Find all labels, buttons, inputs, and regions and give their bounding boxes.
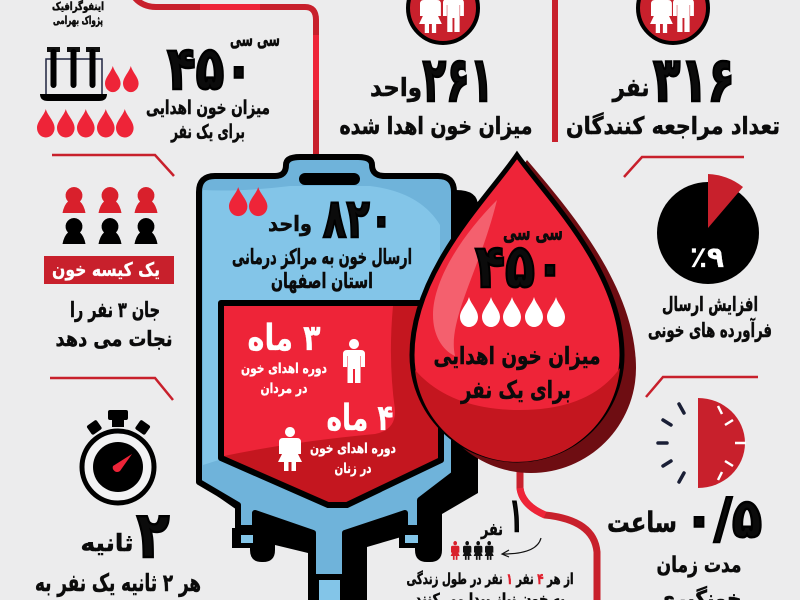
connector pipe: top: [135, 0, 316, 156]
bag shadow: [217, 190, 478, 600]
panel: 450 cc per person, top left: [37, 27, 280, 143]
text: 4 months women: در زنان: [334, 461, 372, 477]
text: 2 seconds: [35, 499, 201, 597]
text: 450 cc: برای یک نفر: [170, 121, 245, 143]
panel: one in four people: [406, 488, 574, 600]
text: 3 months men: ۳ ماه: [248, 318, 321, 359]
text: 9 percent: ٪۹: [690, 240, 724, 274]
icon: test tubes: [40, 47, 107, 101]
panel: number of visitors: [566, 0, 780, 140]
text: saves three people: نجات می دهد: [56, 327, 172, 351]
text: 261 units: واحد: [370, 73, 422, 103]
divider line: top right: [552, 0, 558, 142]
icon: two drops: [229, 187, 267, 216]
text: 450 cc: میزان خون اهدایی: [434, 342, 600, 370]
text: 820 units: [232, 187, 412, 293]
icon: couple badge: [408, 0, 478, 43]
text: 4 months women: دوره اهدای خون: [310, 441, 396, 457]
label: one blood bag: [44, 256, 174, 284]
text: 0.5 hours: [607, 487, 762, 600]
text: 3 months men: دوره اهدای خون: [241, 361, 327, 377]
label: one blood bag: یک کیسه خون: [52, 259, 160, 281]
bag handle slot: [299, 173, 360, 185]
text: 3 months men: [241, 318, 327, 397]
text: 450 cc: ۴۵۰: [167, 34, 253, 104]
connector line: lower right: [646, 377, 758, 397]
large blood drop: [412, 155, 636, 473]
text: 3 months men: در مردان: [260, 381, 308, 397]
panel: 9 percent increase: [648, 174, 772, 342]
connector line: lower left: [50, 378, 173, 400]
text: 261 units: ۲۶۱: [422, 43, 494, 116]
text: 261 units: [340, 43, 532, 140]
text: 450 cc: برای یک نفر: [460, 376, 571, 404]
panel: one in four people: ۱: [510, 488, 522, 542]
drop body: [412, 155, 622, 460]
blood panel: [221, 303, 441, 505]
panel: stopwatch, every 2 seconds: [35, 410, 201, 597]
text: 450 cc: میزان خون اهدایی: [146, 97, 270, 119]
text: 4 months women: [310, 398, 396, 477]
credit text: [52, 0, 104, 27]
pie chart: [657, 174, 759, 284]
text: 820 units: استان اصفهان: [271, 269, 373, 293]
text: 820 units: ارسال خون به مراکز درمانی: [232, 245, 412, 269]
bag highlight: [203, 186, 440, 465]
text: 820 units: ۸۲۰: [323, 187, 393, 250]
text: 316 people: ۳۱۶: [653, 43, 735, 116]
icon: six people: [62, 187, 158, 244]
panel: half hour duration: [607, 398, 762, 600]
text: 2 seconds: هر ۲ ثانیه یک نفر به: [35, 569, 201, 597]
text: 0.5 hours: ساعت: [607, 506, 677, 539]
connector pipe: bottom: [520, 470, 597, 600]
text: 2 seconds: ۲: [136, 499, 170, 573]
connector line: upper left: [52, 155, 174, 176]
text: 820 units: واحد: [268, 212, 312, 236]
icon: four people: [451, 541, 494, 560]
text: 450 cc: سی سی: [230, 27, 280, 51]
text: 1 person: [480, 488, 522, 542]
blood bag: [199, 157, 478, 600]
credit text: اینفوگرافیک: [52, 0, 104, 13]
text: 450 cc: [146, 27, 280, 143]
text: 1 person: نفر: [480, 520, 503, 540]
credit text: پژواک بهرامی: [53, 14, 103, 27]
bag body: [199, 157, 454, 577]
panel: donated units: [340, 0, 532, 140]
text: one in four needs blood: از هر ۴ نفر ۱ نفر در طول زندگی: [406, 570, 574, 588]
icon: half clock: [658, 398, 746, 488]
icon: couple badge: [638, 0, 708, 43]
text: one in four needs blood: [406, 570, 574, 600]
panel: one blood bag saves three lives: [44, 187, 174, 351]
text: 2 seconds: ثانیه: [80, 529, 134, 557]
text: 261 units: میزان خون اهدا شده: [340, 112, 532, 140]
text: 0.5 hours: ۰/۵: [684, 487, 762, 550]
drop shadow: [426, 160, 636, 473]
connector line: upper right: [624, 157, 744, 177]
text: 450 cc: ۴۵۰: [475, 232, 565, 302]
text: 4 months women: ۴ ماه: [326, 398, 394, 439]
text: 316 people: [566, 43, 780, 140]
arrow: [502, 538, 541, 557]
icon: stopwatch: [82, 410, 154, 503]
port caps: [232, 528, 427, 600]
text: saves three people: [56, 298, 172, 351]
icon: red drops: [37, 66, 139, 138]
drop highlight: [433, 200, 497, 356]
icon: five white drops: [460, 297, 565, 327]
drop lower shade: [415, 368, 620, 462]
text: 316 people: نفر: [611, 73, 650, 103]
icon: man: [343, 339, 365, 383]
text: saves three people: جان ۳ نفر را: [70, 298, 160, 322]
text: caption: [648, 292, 772, 342]
icon: woman: [278, 427, 302, 471]
text: 450 cc: سی سی: [503, 220, 563, 246]
text: 450 cc: [434, 220, 600, 404]
text: 0.5 hours: مدت زمان: [656, 553, 742, 578]
